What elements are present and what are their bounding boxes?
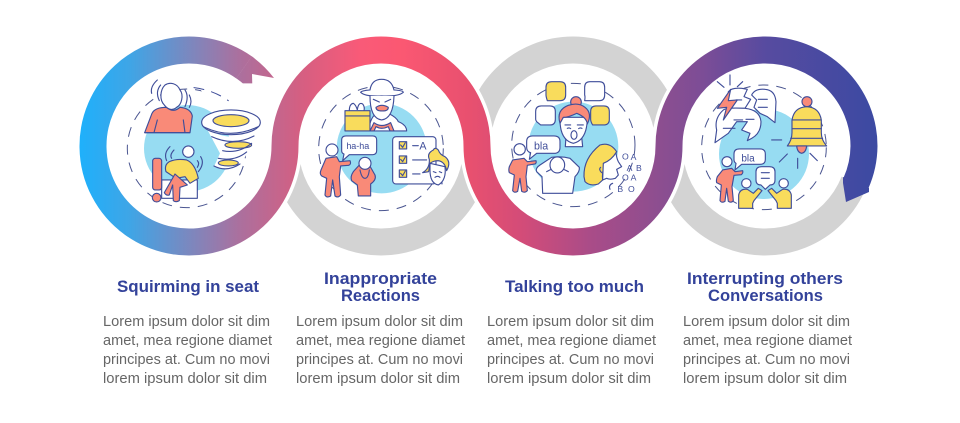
icon: inappropriate reactions: A — [419, 140, 427, 152]
column 2 body: principes at. Cum no movi — [296, 351, 463, 368]
column 3 body: amet, mea regione diamet — [487, 332, 657, 349]
column 3 body: principes at. Cum no movi — [487, 351, 654, 368]
column 4 body — [683, 313, 853, 387]
column 4 heading: Interrupting others — [687, 270, 843, 288]
column 4 body: lorem ipsum dolor sit dim — [683, 370, 847, 387]
icon: talking too much: B — [617, 184, 623, 194]
icon: interrupting conversations: bla — [741, 153, 755, 164]
column 4 body: Lorem ipsum dolor sit dim — [683, 313, 850, 330]
column 3 body: lorem ipsum dolor sit dim — [487, 370, 651, 387]
icon: squirming person and tornado — [127, 80, 260, 208]
icon: talking too much: bla — [534, 140, 548, 152]
column 2 heading — [324, 270, 437, 305]
column 2 heading: Reactions — [341, 287, 420, 305]
icon: talking too much: B — [636, 163, 642, 173]
icon: talking too much: O — [628, 184, 635, 194]
column 1 heading: Squirming in seat — [117, 278, 260, 296]
column 4 heading: Conversations — [708, 287, 823, 305]
icon: talking too much: A — [627, 163, 633, 173]
column 2 body: lorem ipsum dolor sit dim — [296, 370, 460, 387]
icon: talking too much: O — [622, 151, 629, 161]
column 3 body — [487, 313, 657, 387]
grey background ribbon — [285, 50, 861, 242]
icon: talking too much: A — [631, 173, 637, 183]
icon: talking too much — [509, 82, 642, 207]
column 2 body: amet, mea regione diamet — [296, 332, 466, 349]
gradient ribbon with arrow ends — [93, 50, 869, 242]
column 1 body: Lorem ipsum dolor sit dim — [103, 313, 270, 330]
column 4 body: amet, mea regione diamet — [683, 332, 853, 349]
column 3 heading: Talking too much — [505, 278, 644, 296]
icon: talking too much: A — [631, 152, 637, 162]
column 2 body — [296, 313, 466, 387]
column 3 body: Lorem ipsum dolor sit dim — [487, 313, 654, 330]
icon: talking too much: O — [622, 173, 629, 183]
icon: inappropriate reactions — [319, 79, 449, 211]
column 1 body: lorem ipsum dolor sit dim — [103, 370, 267, 387]
icon: inappropriate reactions: ha-ha — [346, 141, 369, 151]
column 1 body — [103, 313, 273, 387]
icon: interrupting conversations — [702, 75, 827, 210]
column 4 body: principes at. Cum no movi — [683, 351, 850, 368]
column 1 body: principes at. Cum no movi — [103, 351, 270, 368]
column 1 body: amet, mea regione diamet — [103, 332, 273, 349]
column 4 heading — [687, 270, 843, 305]
column 2 body: Lorem ipsum dolor sit dim — [296, 313, 463, 330]
column 2 heading: Inappropriate — [324, 270, 437, 288]
